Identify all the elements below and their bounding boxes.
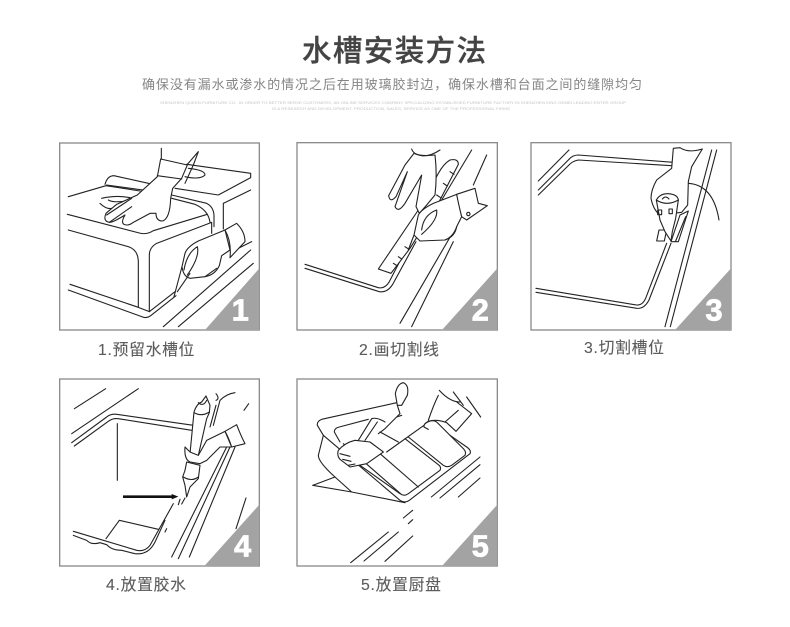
panel: step 1 [60, 143, 259, 330]
subtitle: 确保没有漏水或渗水的情况之后在用玻璃胶封边，确保水槽和台面之间的缝隙均匀 [142, 77, 642, 92]
icon: hand with knife [174, 223, 245, 297]
step number [442, 268, 497, 330]
sink cut-out lines [72, 389, 249, 559]
icon: left hand [338, 425, 424, 467]
panel: step 2 [297, 143, 497, 330]
small English text: IS A RESEARCH AND DEVELOPMENT, PRODUCTION, SALES, SERVICE AS ONE OF THE PROFESSIONAL FIRMS [272, 106, 510, 111]
arrow [123, 494, 178, 499]
icon: right hand with cutter [408, 188, 487, 250]
icon: hand holding jigsaw [651, 148, 702, 242]
ruler [378, 160, 458, 273]
step number [675, 268, 731, 330]
icon: caulking gun and hands [183, 393, 245, 497]
label: step 5: 5.放置厨盘 [361, 575, 442, 594]
step number: 1 [232, 293, 249, 327]
panel: step 4 [60, 379, 259, 566]
panel: step 3 [531, 143, 731, 330]
small English text: SHENZHEN QUEEN FURNITURE CO., IN ORDER TO BETTER SERVE CUSTOMERS, AN ONLINE SERVICES COMPANY SPECIALIZING ESTABLISHED FURNITURE FACTORY IN SHENZHEN KING GEMEI LEADING ENTER GROUP [160, 100, 626, 105]
step number [205, 268, 259, 330]
step number: 4 [234, 530, 251, 564]
icon: right hand lifting sink [424, 390, 481, 431]
panel: step 5 [297, 379, 497, 566]
counter lines [305, 150, 487, 327]
small English text [160, 100, 626, 111]
step number [204, 505, 259, 566]
counter lines [351, 457, 480, 563]
step number: 5 [472, 530, 489, 564]
sink body [313, 403, 470, 503]
label: step 1: 1.预留水槽位 [98, 341, 195, 359]
title: 水槽安装方法 [302, 35, 486, 68]
back sink illustration [105, 164, 251, 229]
label: step 2: 2.画切割线 [359, 341, 440, 359]
step number: 2 [472, 293, 489, 327]
step number [442, 505, 497, 566]
label: step 3: 3.切割槽位 [584, 339, 665, 357]
icon: hanging hand at top [378, 383, 408, 434]
icon: hand pressing on sink [105, 148, 198, 225]
front sink illustration [67, 186, 253, 327]
step number: 3 [705, 293, 723, 327]
icon: left hand [389, 149, 440, 213]
label: step 4: 4.放置胶水 [106, 576, 187, 594]
counter and cut outline [536, 150, 719, 327]
